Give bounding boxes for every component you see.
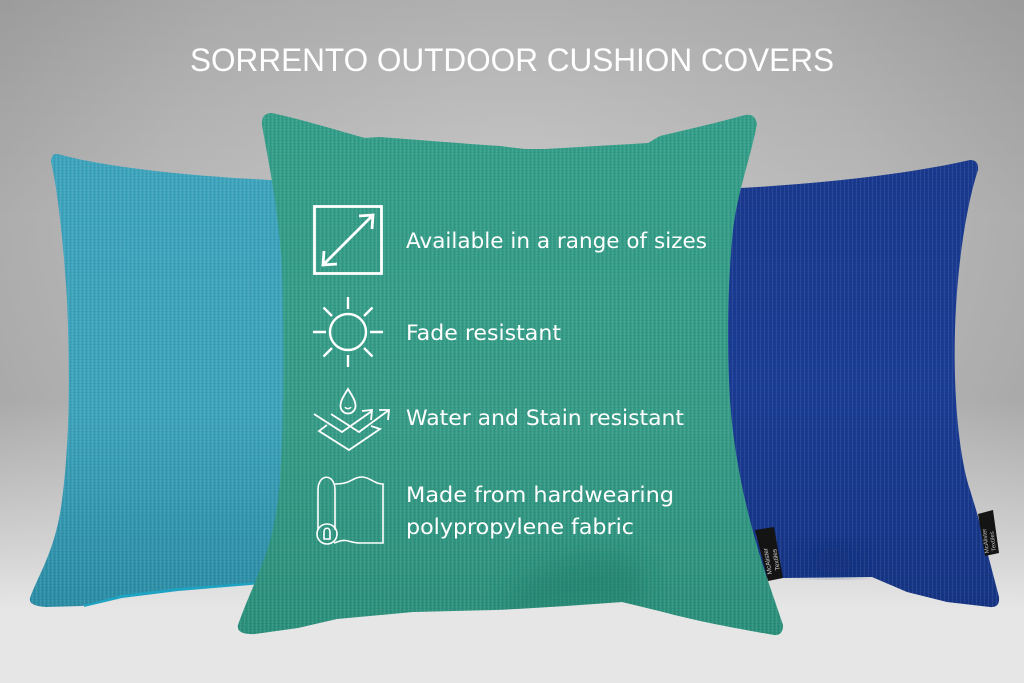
label: right cushion tag: Textiles xyxy=(990,531,998,551)
label: right cushion tag xyxy=(978,510,999,556)
cushion: dark blue xyxy=(700,160,999,607)
text: fabric xyxy=(406,483,674,540)
icon: sun xyxy=(313,297,383,367)
cushion: green centre xyxy=(230,105,790,645)
label: centre cushion tag: McAlister xyxy=(762,547,774,575)
title: SORRENTO OUTDOOR CUSHION COVERS xyxy=(190,42,834,78)
label: centre cushion tag xyxy=(755,527,783,581)
label: centre cushion tag: Textiles xyxy=(771,548,782,571)
text: fabric: Made from hardwearing xyxy=(406,483,674,508)
label: right cushion tag: McAlister xyxy=(982,528,991,553)
icon: resize arrow xyxy=(314,206,382,274)
text: fade: Fade resistant xyxy=(406,321,561,346)
icon: fabric roll xyxy=(317,477,383,544)
cushion: light blue xyxy=(30,154,320,607)
text: sizes: Available in a range of sizes xyxy=(406,229,707,254)
text: water: Water and Stain resistant xyxy=(406,406,684,431)
text: fabric: polypropylene fabric xyxy=(406,515,634,540)
icon: water repellent xyxy=(314,389,389,450)
